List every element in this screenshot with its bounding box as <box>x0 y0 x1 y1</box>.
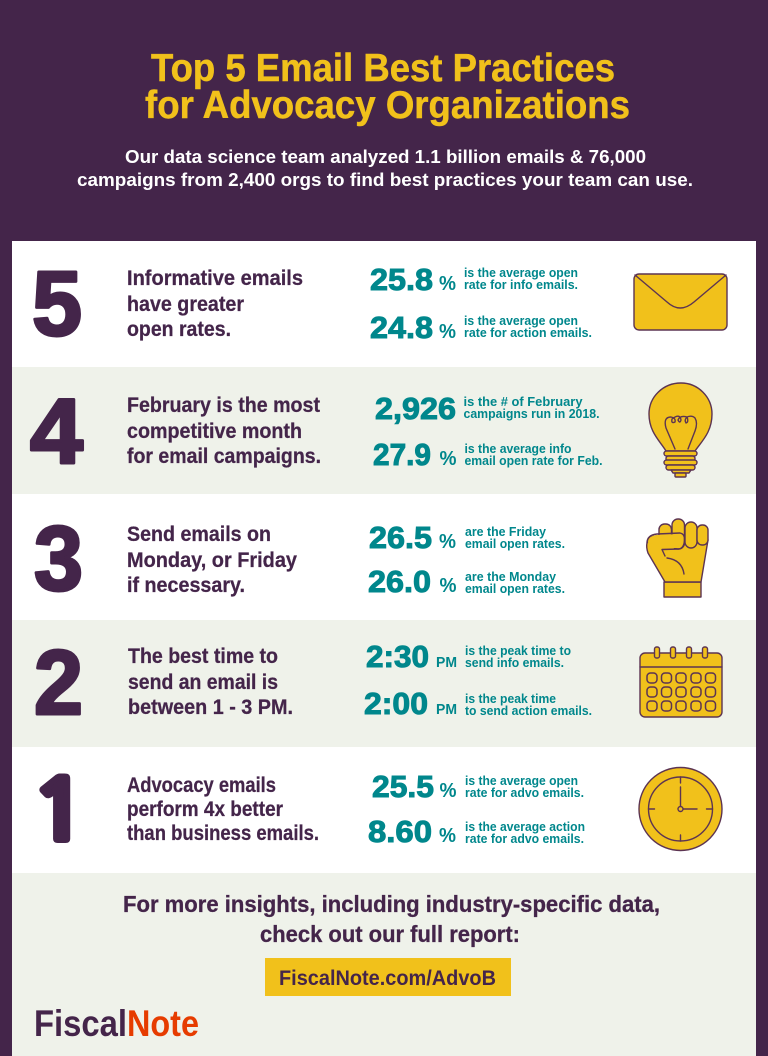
stat: 27.9%: email open rate for Feb. <box>464 454 602 468</box>
stat: 27.9%: 27.9 <box>373 437 431 472</box>
stat: 26.5%: email open rates. <box>465 537 565 551</box>
stat: 2:30 PM <box>366 639 571 674</box>
heading: practice 3: if necessary. <box>127 574 245 597</box>
subtitle: Our data science team analyzed 1.1 billion emails & 76,000 <box>125 146 646 167</box>
stat: 2:30 PM: 2:30 <box>366 639 429 674</box>
stat: 26.0%: are the Monday <box>465 570 556 584</box>
logo: FiscalNote <box>34 1003 199 1044</box>
stat: 25.8% <box>370 262 578 297</box>
stat: 27.9%: is the average info <box>464 442 572 456</box>
logo: FiscalNote: Fiscal <box>34 1003 127 1044</box>
icon: clock <box>639 768 722 850</box>
stat: 25.5%: % <box>440 780 457 802</box>
stat: 27.9% <box>373 437 602 472</box>
link button: FiscalNote.com/AdvoB <box>279 967 496 990</box>
stat: 26.5%: are the Friday <box>465 525 546 539</box>
call to action text: check out our full report: <box>260 921 520 947</box>
stat: 26.0%: 26.0 <box>368 564 431 599</box>
panel: practice 5 <box>12 241 756 367</box>
stat: 2:00 PM: is the peak time <box>465 692 556 706</box>
heading: practice 2: send an email is <box>128 671 278 694</box>
heading: practice 5: have greater <box>127 293 244 316</box>
heading: practice 5 <box>127 267 303 341</box>
heading: practice 3 <box>127 523 297 597</box>
panel: practice 1 <box>12 747 756 873</box>
stat: 2,926: is the # of February <box>464 395 583 409</box>
number 4: 4 <box>30 381 83 483</box>
stat: 25.5%: is the average open <box>465 774 578 788</box>
stat: 2:00 PM <box>364 686 592 721</box>
heading: practice 1: Advocacy emails <box>127 774 276 797</box>
stat: 2:30 PM: send info emails. <box>465 656 564 670</box>
stat: 26.5% <box>369 520 565 555</box>
title <box>145 47 630 127</box>
stat: 27.9%: % <box>440 448 457 470</box>
stat: 8.60%: % <box>439 825 456 847</box>
number 5: 5 <box>32 253 82 355</box>
stat: 25.5%: rate for advo emails. <box>465 786 584 800</box>
heading: practice 5: open rates. <box>127 318 231 341</box>
heading: practice 1 <box>127 774 319 845</box>
stat: 26.5%: % <box>439 531 456 553</box>
stat: 8.60%: rate for advo emails. <box>465 832 584 846</box>
heading: practice 4: February is the most <box>127 394 320 417</box>
heading: practice 2: between 1 - 3 PM. <box>128 696 293 719</box>
number 1: 1 <box>30 771 88 853</box>
stat: 2:00 PM: PM <box>436 702 457 718</box>
call to action text: For more insights, including industry-specific data, <box>123 891 660 917</box>
number 2: 2 <box>34 632 83 734</box>
stat: 8.60%: is the average action <box>465 820 585 834</box>
subtitle <box>77 146 693 190</box>
stat: 8.60%: 8.60 <box>368 814 432 849</box>
number 3: 3 <box>34 508 83 610</box>
stat: 25.8%: is the average open <box>464 266 578 280</box>
title: Top 5 Email Best Practices <box>151 47 615 90</box>
stat: 8.60% <box>368 814 585 849</box>
stat: 2,926 <box>375 391 600 426</box>
stat: 26.0%: % <box>440 575 457 597</box>
heading: practice 3: Send emails on <box>127 523 271 546</box>
heading: practice 3: Monday, or Friday <box>127 549 297 572</box>
stat: 2:00 PM: 2:00 <box>364 686 428 721</box>
panel: practice 2 <box>12 620 756 747</box>
stat: 2,926: campaigns run in 2018. <box>464 407 600 421</box>
stat: 25.5% <box>372 769 584 804</box>
stat: 25.5%: 25.5 <box>372 769 434 804</box>
link button <box>265 958 511 996</box>
title: for Advocacy Organizations <box>145 84 630 127</box>
heading: practice 2: The best time to <box>128 645 278 668</box>
subtitle: campaigns from 2,400 orgs to find best practices your team can use. <box>77 169 693 190</box>
heading: practice 4: for email campaigns. <box>127 445 321 468</box>
stat: 26.0% <box>368 564 565 599</box>
heading: practice 4: competitive month <box>127 420 302 443</box>
call to action text <box>123 891 660 947</box>
icon: calendar <box>640 647 722 717</box>
stat: 2:30 PM: is the peak time to <box>465 644 571 658</box>
stat: 24.8%: rate for action emails. <box>464 326 592 340</box>
logo: FiscalNote: Note <box>127 1003 199 1044</box>
stat: 2:00 PM: to send action emails. <box>465 704 592 718</box>
stat: 24.8%: 24.8 <box>370 310 433 345</box>
panel: practice 4 <box>12 367 756 494</box>
stat: 24.8%: % <box>439 321 456 343</box>
heading: practice 4 <box>127 394 321 468</box>
stat: 25.8%: 25.8 <box>370 262 433 297</box>
heading: practice 1: than business emails. <box>127 822 319 845</box>
stat: 24.8% <box>370 310 592 345</box>
stat: 2,926: 2,926 <box>375 391 456 426</box>
stat: 26.0%: email open rates. <box>465 582 565 596</box>
icon: raised fist <box>647 519 708 597</box>
icon: light bulb <box>649 383 712 477</box>
heading: practice 2 <box>128 645 293 719</box>
stat: 25.8%: % <box>439 273 456 295</box>
stat: 25.8%: rate for info emails. <box>464 278 578 292</box>
stat: 24.8%: is the average open <box>464 314 578 328</box>
panel: practice 3 <box>12 494 756 620</box>
panel: footer <box>12 873 756 1056</box>
heading: practice 1: perform 4x better <box>127 798 283 821</box>
stat: 26.5%: 26.5 <box>369 520 432 555</box>
heading: practice 5: Informative emails <box>127 267 303 290</box>
stat: 2:30 PM: PM <box>436 655 457 671</box>
icon: envelope <box>634 274 727 330</box>
